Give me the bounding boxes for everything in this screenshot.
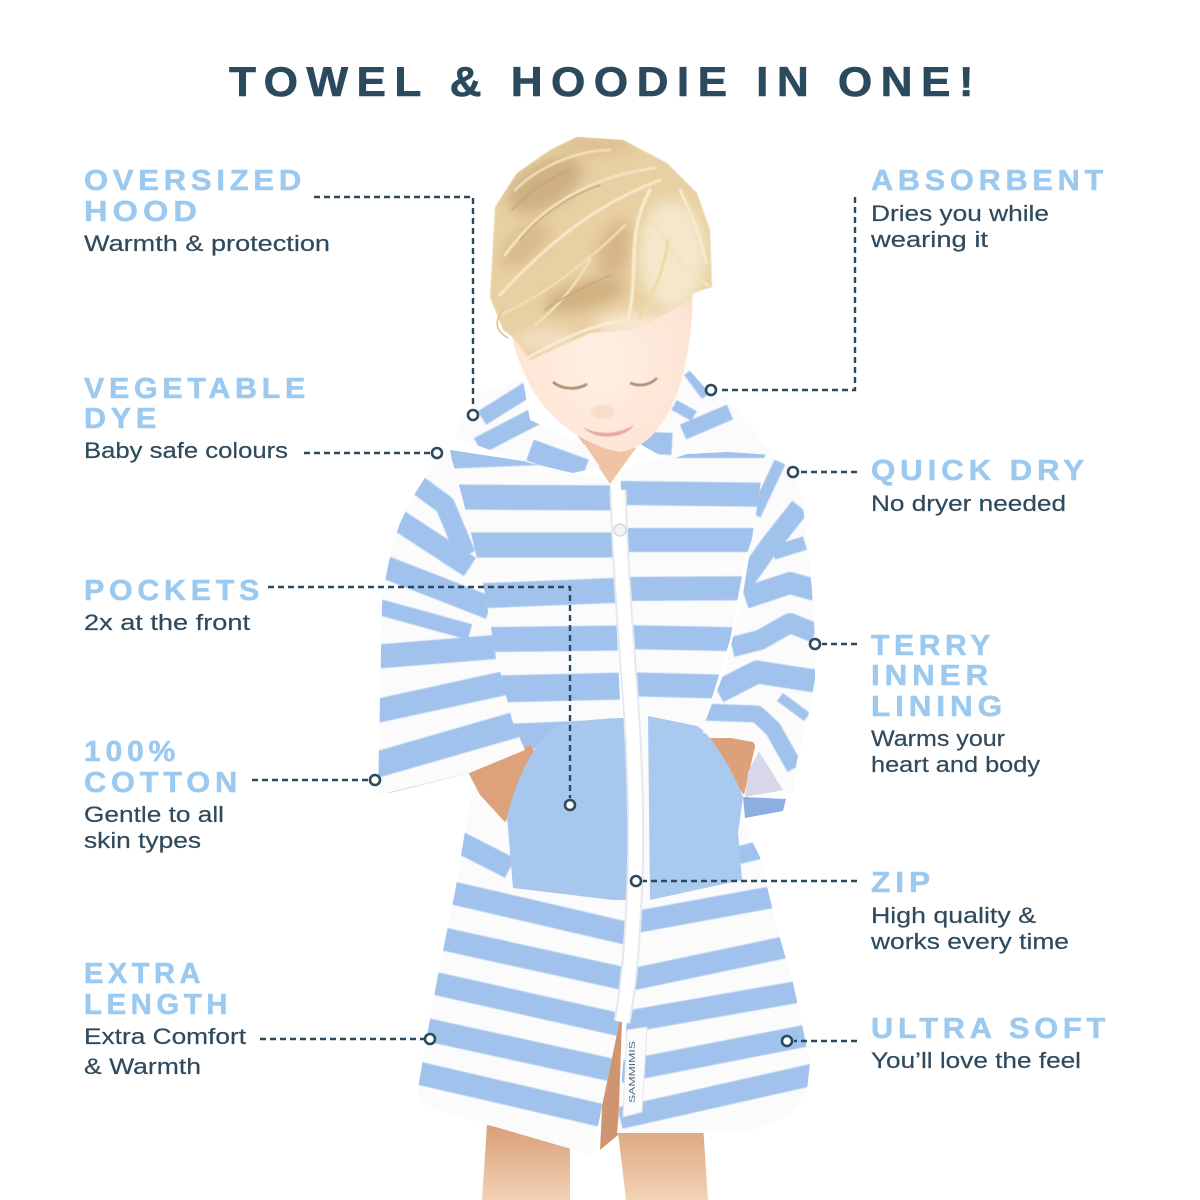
callout: terry inner lining: heart and body bbox=[871, 752, 1041, 777]
callout: oversized hood: OVERSIZED bbox=[84, 165, 306, 197]
pocket left bbox=[507, 718, 630, 900]
callout: zip: High quality & bbox=[871, 903, 1036, 928]
callout: ultra soft: You’ll love the feel bbox=[871, 1048, 1081, 1073]
callout: vegetable dye bbox=[84, 373, 442, 463]
hood right bbox=[640, 370, 766, 458]
callout: extra length: LENGTH bbox=[84, 989, 232, 1021]
sewn brand label: SAMMIMIS bbox=[627, 1041, 637, 1103]
callout: pockets bbox=[84, 575, 575, 810]
callout: terry inner lining: INNER bbox=[871, 660, 993, 692]
right sleeve bbox=[703, 455, 815, 793]
callout: terry inner lining bbox=[810, 630, 1041, 777]
left sleeve bbox=[372, 453, 525, 796]
callout: vegetable dye: VEGETABLE bbox=[84, 373, 310, 405]
callout: vegetable dye: Baby safe colours bbox=[84, 438, 288, 463]
callout: pockets: POCKETS bbox=[84, 575, 264, 607]
neck bbox=[575, 432, 636, 484]
callout: zip bbox=[631, 867, 1069, 954]
callout: terry inner lining: TERRY bbox=[871, 630, 995, 662]
child wearing striped hooded towel robe bbox=[372, 135, 820, 1200]
eyelashes bbox=[553, 382, 587, 388]
callout: zip: ZIP bbox=[871, 867, 935, 899]
callout: absorbent: ABSORBENT bbox=[871, 165, 1108, 197]
callout: extra length: & Warmth bbox=[84, 1054, 201, 1079]
legs bbox=[482, 1020, 708, 1200]
callout: absorbent: Dries you while bbox=[871, 201, 1049, 226]
callout: 100% cotton: 100% bbox=[84, 736, 180, 768]
callout: pockets: 2x at the front bbox=[84, 610, 251, 635]
callout: zip: works every time bbox=[870, 929, 1069, 954]
callout: oversized hood bbox=[84, 165, 478, 420]
callout: oversized hood: Warmth & protection bbox=[84, 231, 330, 256]
callout: 100% cotton: Gentle to all bbox=[84, 802, 224, 827]
callout: extra length: Extra Comfort bbox=[84, 1024, 247, 1049]
sewn brand label bbox=[623, 1027, 647, 1117]
hands in pockets bbox=[467, 738, 786, 822]
pocket right bbox=[648, 716, 743, 900]
hair bbox=[490, 135, 712, 360]
callout: terry inner lining: LINING bbox=[871, 691, 1007, 723]
callout: quick dry: QUICK DRY bbox=[871, 455, 1089, 487]
callout: ultra soft: ULTRA SOFT bbox=[871, 1013, 1110, 1045]
callout: oversized hood: HOOD bbox=[84, 196, 202, 228]
robe front right panel bbox=[617, 448, 820, 1133]
callout: extra length: EXTRA bbox=[84, 958, 205, 990]
hood left bbox=[473, 382, 600, 473]
callout: 100% cotton: COTTON bbox=[84, 767, 242, 799]
callout: extra length bbox=[84, 958, 435, 1079]
callout: terry inner lining: Warms your bbox=[871, 726, 1006, 751]
callout: 100% cotton: skin types bbox=[84, 828, 201, 853]
callout: ultra soft bbox=[782, 1013, 1110, 1073]
callout: absorbent: wearing it bbox=[870, 227, 989, 252]
robe front left panel bbox=[405, 450, 630, 1155]
face bbox=[508, 252, 692, 452]
callout: quick dry: No dryer needed bbox=[871, 491, 1066, 516]
zip bbox=[614, 490, 636, 1022]
mouth bbox=[583, 425, 634, 437]
callout: vegetable dye: DYE bbox=[84, 403, 161, 435]
callout: absorbent bbox=[706, 165, 1108, 395]
callout: quick dry bbox=[788, 455, 1089, 516]
title: TOWEL & HOODIE IN ONE! bbox=[229, 58, 982, 105]
callout: 100% cotton bbox=[84, 736, 380, 853]
